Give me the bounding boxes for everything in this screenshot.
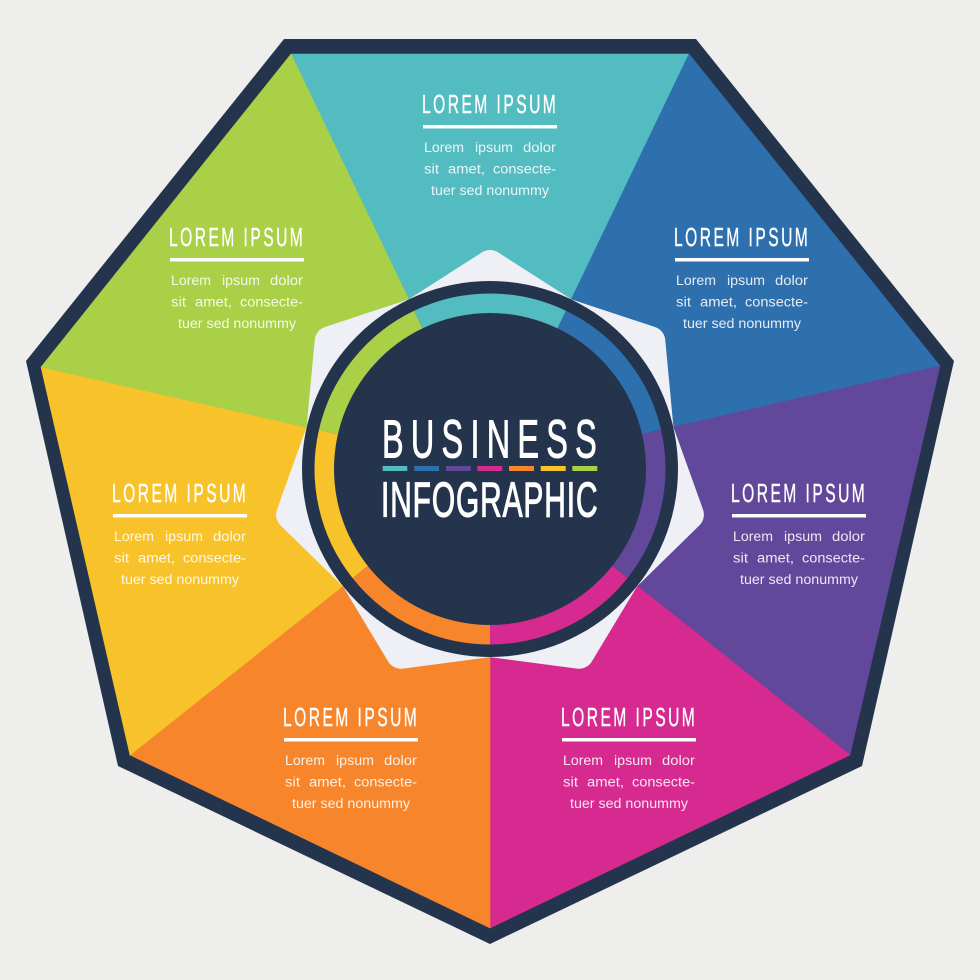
body text: dolor (523, 140, 557, 155)
panel: blue text (674, 223, 809, 331)
body text: amet, (700, 294, 737, 310)
body text: Lorem (676, 273, 716, 288)
body text: consecte- (354, 774, 417, 790)
ring arc: blue (562, 320, 651, 432)
coloured inner ring (325, 304, 655, 634)
body text: Lorem (563, 753, 603, 768)
body text: sit (171, 294, 186, 310)
body text (114, 529, 247, 587)
central title block (381, 410, 598, 527)
underline (284, 738, 418, 742)
panel: teal text (422, 90, 557, 198)
body text: ipsum (222, 273, 260, 288)
ring arc: magenta (490, 572, 620, 634)
ring arc: purple (620, 432, 655, 572)
body text (563, 753, 696, 811)
body text: ipsum (475, 140, 513, 155)
body text (285, 753, 418, 811)
body text: Lorem (733, 529, 773, 544)
body text: Lorem (171, 273, 211, 288)
body text: amet, (195, 294, 232, 310)
body text: consecte- (745, 294, 808, 310)
body text: tuer sed nonummy (683, 316, 801, 331)
panel: orange text (283, 703, 418, 811)
body text: Lorem (285, 753, 325, 768)
body text: amet, (757, 550, 794, 566)
underline (423, 125, 557, 128)
title line: business: BUSINESS (382, 410, 597, 470)
body text: tuer sed nonummy (570, 796, 688, 811)
body text (424, 140, 557, 198)
heading: LOREM IPSUM (561, 703, 695, 732)
colour key bars (383, 466, 597, 471)
sector: blue (490, 54, 940, 469)
body text: amet, (138, 550, 175, 566)
central dark circle (334, 313, 646, 625)
underline (113, 514, 247, 518)
underline (170, 258, 304, 262)
body text: sit (563, 774, 578, 790)
sector: teal (291, 54, 689, 469)
body text: consecte- (632, 774, 695, 790)
body text: dolor (270, 273, 304, 288)
body text: tuer sed nonummy (121, 572, 239, 587)
body text: sit (676, 294, 691, 310)
body text: ipsum (336, 753, 374, 768)
body text: sit (733, 550, 748, 566)
sector: purple (490, 366, 940, 755)
dark outer ring (302, 281, 678, 657)
body text: consecte- (493, 162, 556, 176)
body text: dolor (832, 529, 866, 544)
heading: LOREM IPSUM (674, 223, 808, 252)
body text: amet, (309, 774, 346, 790)
body text: consecte- (240, 294, 303, 310)
body text: Lorem (114, 529, 154, 544)
body text (171, 273, 304, 331)
body text: consecte- (802, 550, 865, 566)
underline (732, 514, 866, 518)
title line: infographic: INFOGRAPHIC (381, 472, 598, 527)
body text: tuer sed nonummy (178, 316, 296, 331)
body text: ipsum (784, 529, 822, 544)
body text: dolor (775, 273, 809, 288)
body text: sit (285, 774, 300, 790)
ring arc: orange (360, 572, 490, 634)
body text: ipsum (614, 753, 652, 768)
underline (675, 258, 809, 262)
body text: consecte- (183, 550, 246, 566)
body text: dolor (384, 753, 418, 768)
body text: tuer sed nonummy (292, 796, 410, 811)
sector: green (41, 54, 490, 469)
body text: ipsum (727, 273, 765, 288)
body text: sit (424, 162, 439, 176)
panel: yellow text (112, 479, 247, 587)
sector: yellow (41, 367, 490, 755)
body text: tuer sed nonummy (431, 183, 549, 198)
body text: sit (114, 550, 129, 566)
body text: ipsum (165, 529, 203, 544)
body text: Lorem (424, 140, 464, 155)
underline (562, 738, 696, 742)
panel: purple text (731, 479, 866, 587)
body text: tuer sed nonummy (740, 572, 858, 587)
panel: magenta text (561, 703, 696, 811)
sector: magenta (490, 469, 850, 928)
heading: LOREM IPSUM (112, 479, 246, 508)
body text: amet, (448, 162, 485, 176)
white seven-point star (291, 265, 689, 654)
sector: orange (130, 469, 490, 928)
ring arc: yellow (325, 432, 360, 572)
panel: green text (169, 223, 304, 331)
ring arc: teal (418, 304, 562, 320)
body text: dolor (662, 753, 696, 768)
body text: dolor (213, 529, 247, 544)
heading: LOREM IPSUM (169, 223, 303, 252)
body text (733, 529, 866, 587)
body text (676, 273, 809, 331)
heading: LOREM IPSUM (283, 703, 417, 732)
heading: LOREM IPSUM (731, 479, 865, 508)
heading: LOREM IPSUM (422, 90, 556, 119)
body text: amet, (587, 774, 624, 790)
ring arc: green (329, 320, 418, 432)
